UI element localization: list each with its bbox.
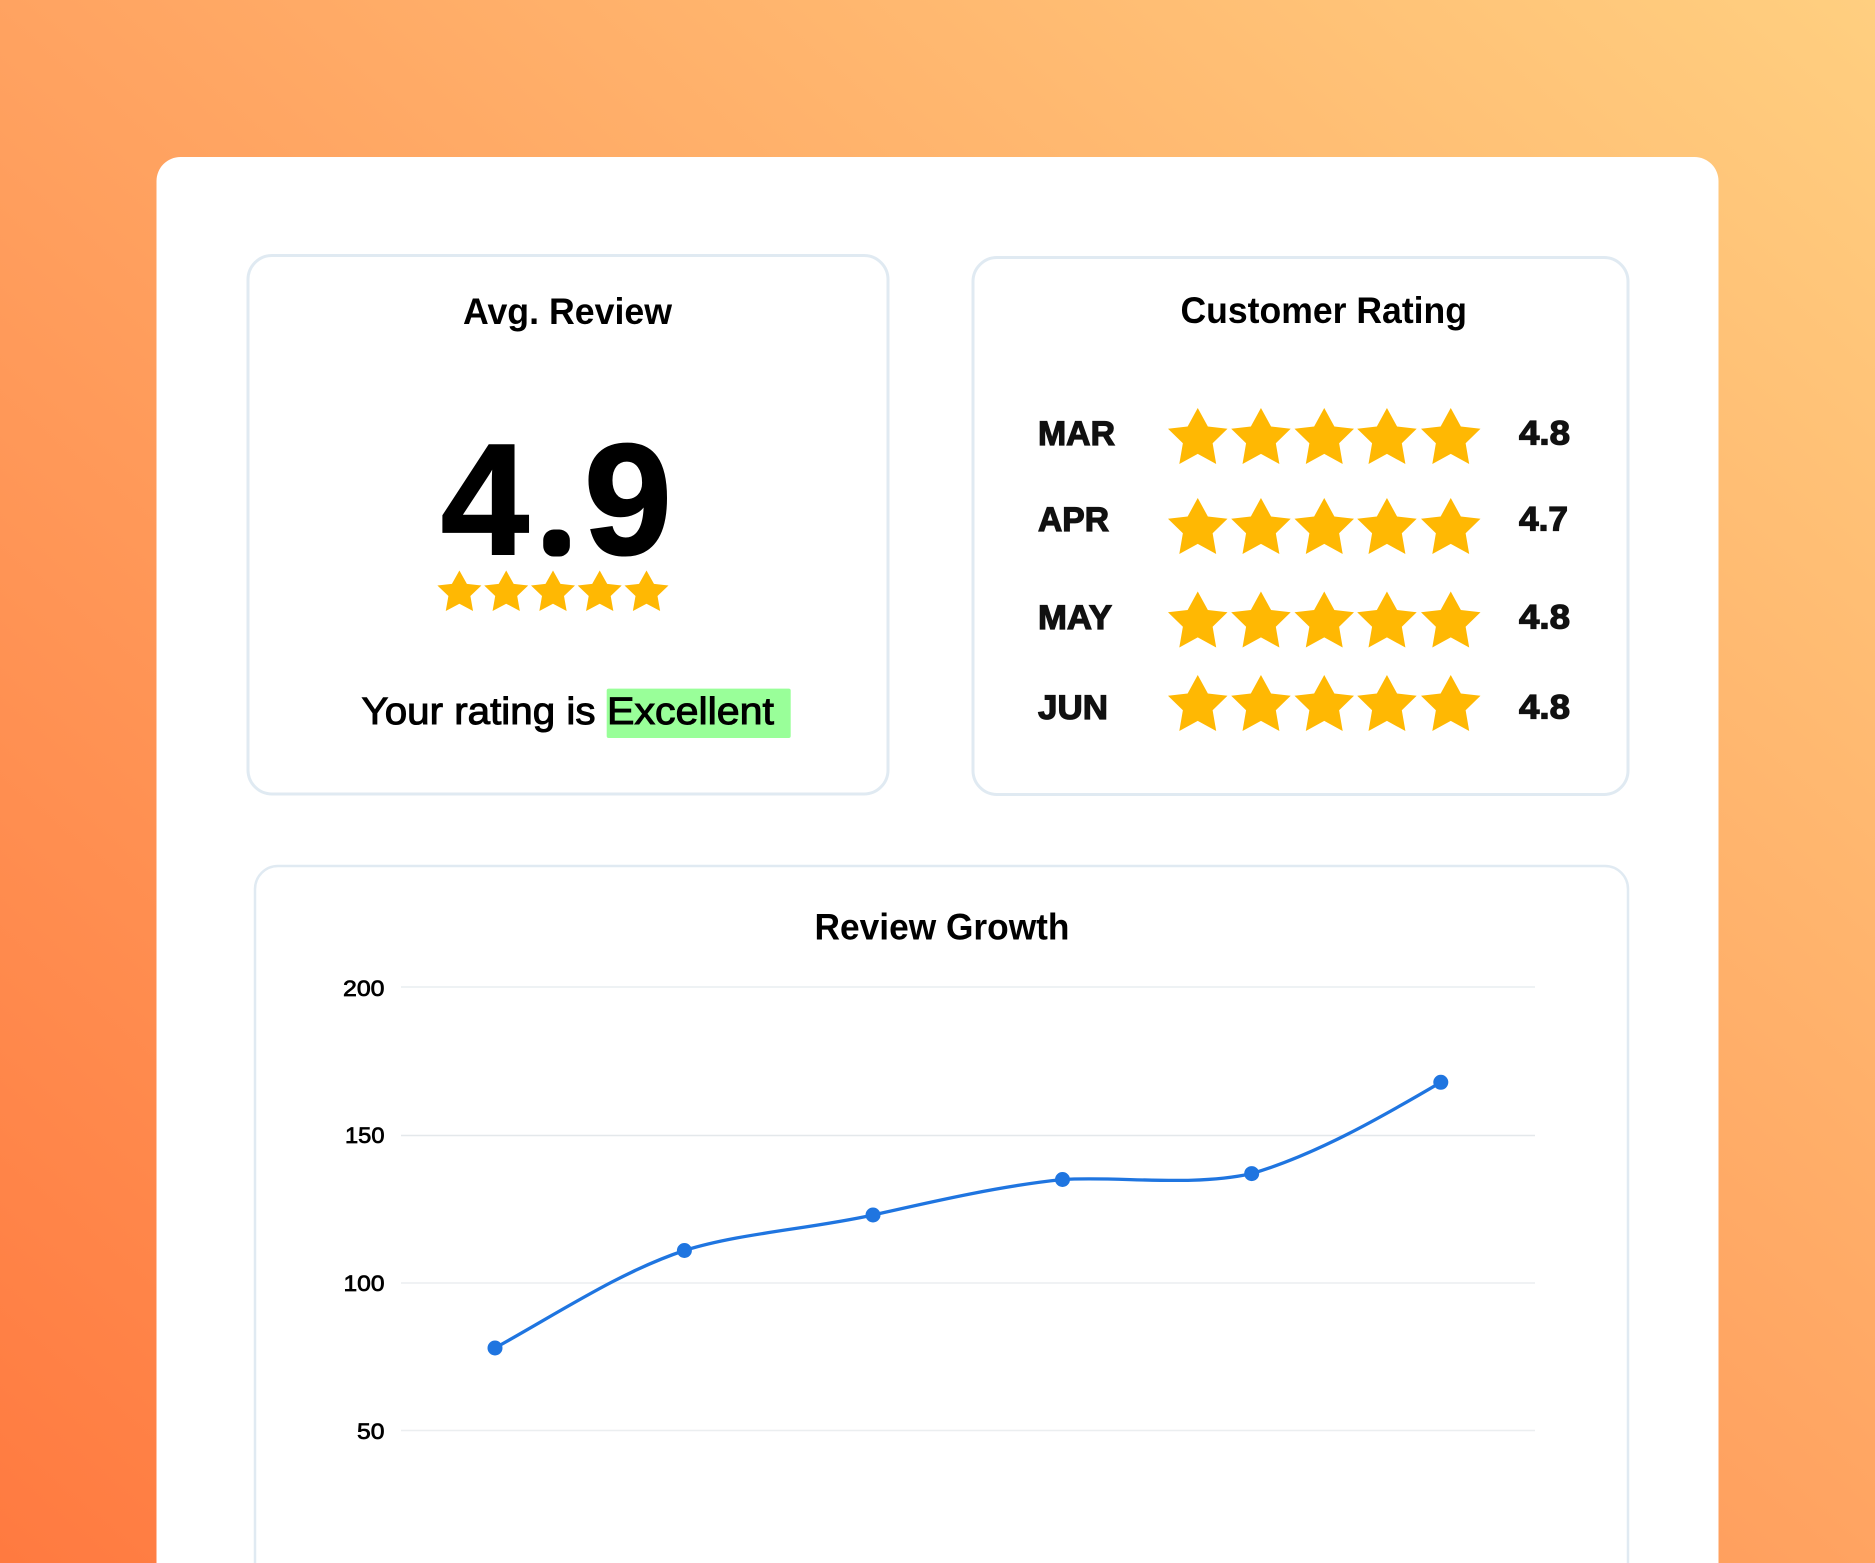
row: June: 4.8 xyxy=(1519,688,1570,726)
row: May: MAY xyxy=(1038,599,1112,637)
row: May: 4.8 xyxy=(1519,598,1570,636)
heading: Customer Rating: Customer Rating xyxy=(1180,290,1467,331)
heading: Avg. Review: Avg. Review xyxy=(463,291,672,332)
row: March: MAR xyxy=(1038,415,1115,453)
panel: average review xyxy=(248,256,888,794)
y axis labels: 50 xyxy=(357,1419,384,1444)
white card xyxy=(156,157,1718,1563)
panel border xyxy=(973,258,1628,794)
panel: review growth xyxy=(255,866,1628,1563)
row: June: JUN xyxy=(1038,689,1108,727)
row: June xyxy=(1038,675,1570,731)
y axis labels: 200 xyxy=(343,976,384,1001)
highlight: excellent xyxy=(607,689,791,738)
y axis labels xyxy=(343,976,384,1444)
big score: . xyxy=(551,511,562,555)
big score: 4 xyxy=(441,412,529,588)
panel border xyxy=(248,256,888,794)
line chart xyxy=(343,976,1535,1444)
y axis labels: 150 xyxy=(345,1123,384,1148)
row: May xyxy=(1038,592,1570,648)
row: April: APR xyxy=(1038,501,1109,539)
heading: Review Growth: Review Growth xyxy=(814,906,1070,948)
row: March xyxy=(1038,408,1570,464)
icon: five small stars xyxy=(437,570,668,611)
row: March: 4.8 xyxy=(1519,414,1570,452)
row: April xyxy=(1038,498,1568,554)
rating sentence: Your rating is xyxy=(362,691,596,733)
panel: customer rating xyxy=(973,258,1628,794)
y axis labels: 100 xyxy=(344,1271,384,1296)
data points xyxy=(488,1075,1448,1356)
panel border xyxy=(255,866,1628,1563)
rating word: Excellent xyxy=(607,691,774,733)
big score: 9 xyxy=(584,412,672,588)
row: April: 4.7 xyxy=(1519,500,1568,538)
data line xyxy=(495,1082,1441,1348)
